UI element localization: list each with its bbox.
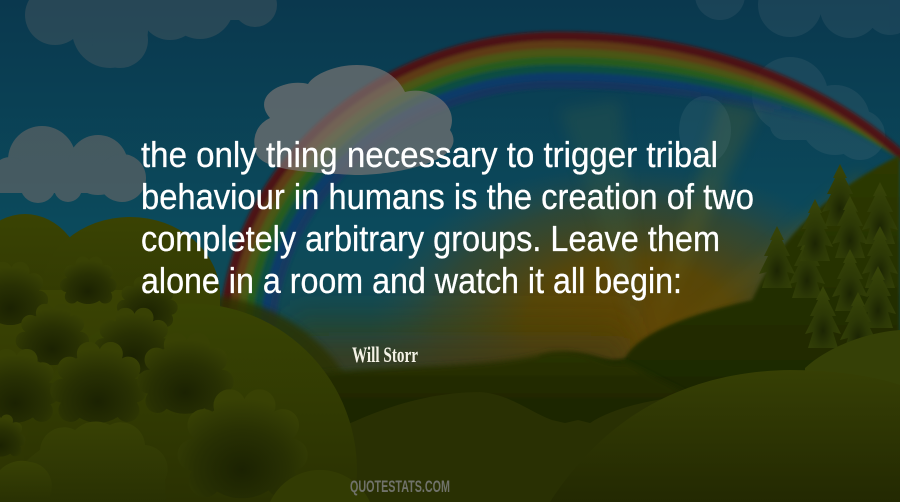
- rainbow: [221, 30, 900, 315]
- faint cloud right of centre: [679, 96, 731, 164]
- hill: large left: [220, 306, 350, 502]
- hill: back right: [805, 330, 900, 385]
- hills: right background: [564, 155, 900, 392]
- hills: centre front: [350, 393, 660, 502]
- author: Will Storr: [352, 342, 418, 367]
- sun rays: [567, 102, 861, 296]
- quote text: alone in a room and watch it all begin:: [141, 260, 682, 301]
- hill: front right: [640, 370, 900, 502]
- quote text: completely arbitrary groups. Leave them: [141, 218, 720, 259]
- quote text: [141, 134, 754, 301]
- clouds: far right: [695, 0, 900, 160]
- pine trees: [759, 164, 898, 354]
- bushes: [0, 270, 276, 493]
- low horizon haze: [290, 304, 631, 372]
- watermark: QUOTESTATS.COM: [350, 477, 450, 496]
- quote text: the only thing necessary to trigger tribal: [141, 134, 718, 175]
- shadow edge of left hill: [220, 293, 342, 374]
- cloud: top left: [25, 0, 277, 68]
- sunset glow: [398, 176, 800, 362]
- quote text: behaviour in humans is the creation of two: [141, 176, 754, 217]
- hills: back left: [0, 214, 220, 470]
- hills: centre back: [328, 350, 643, 423]
- hill: bottom centre: [270, 477, 370, 502]
- cloud: left: [0, 126, 146, 203]
- sky background: [0, 189, 828, 325]
- cloud: centre: [254, 65, 454, 175]
